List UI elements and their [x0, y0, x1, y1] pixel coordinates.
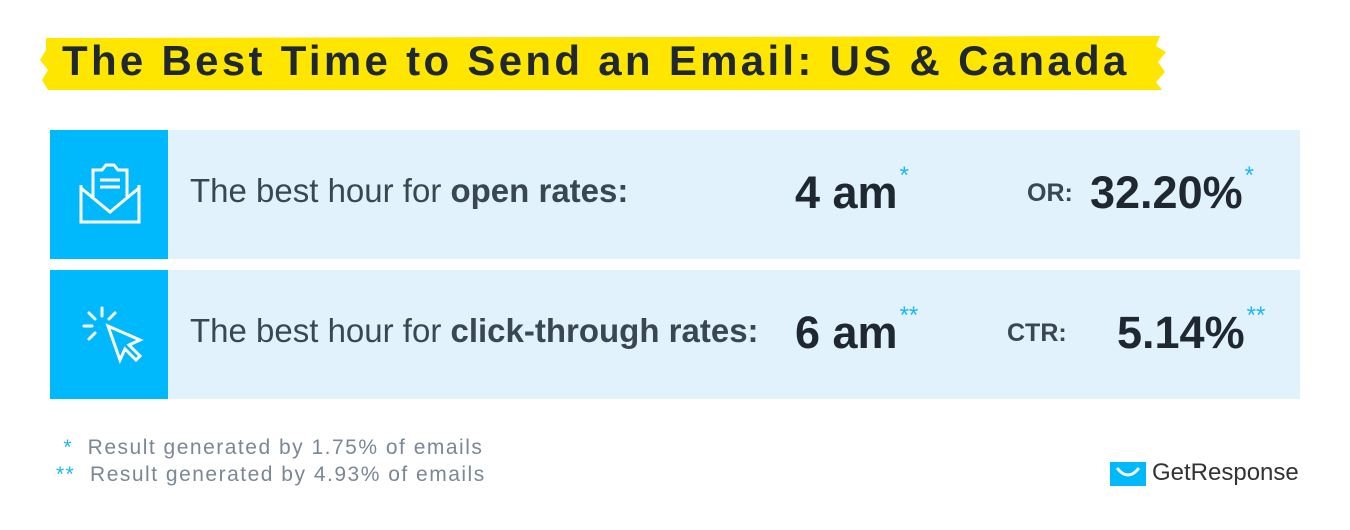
OR label: OR:	[1027, 179, 1073, 207]
title text: The Best Time to Send an Email: US & Canada	[62, 37, 1130, 84]
OR value: 32.20%*	[1090, 162, 1254, 218]
panel: open rates	[50, 130, 1300, 259]
logo: GetResponse: GetResponse	[1152, 459, 1299, 486]
icon: cursor click	[50, 270, 168, 399]
label: The best hour for click-through rates:	[190, 312, 759, 349]
panel: click-through rates	[50, 270, 1300, 399]
value: 6 am: 6 am**	[795, 302, 918, 358]
footnote 1: * Result generated by 1.75% of emails	[63, 436, 483, 459]
label: The best hour for open rates:	[190, 172, 628, 209]
CTR value: 5.14%**	[1117, 302, 1265, 358]
CTR label: CTR:	[1007, 319, 1067, 347]
footnote 2: ** Result generated by 4.93% of emails	[56, 463, 486, 486]
icon: envelope	[50, 130, 168, 259]
title banner	[40, 36, 1166, 90]
value: 4 am: 4 am*	[795, 162, 909, 218]
